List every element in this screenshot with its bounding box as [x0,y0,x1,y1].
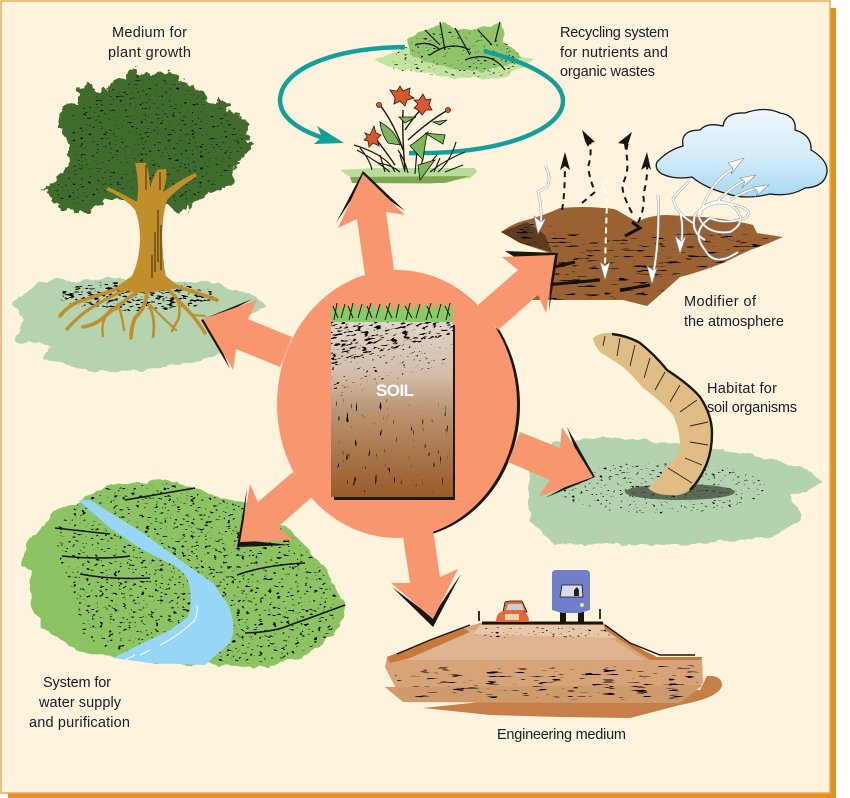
white arrows [538,165,765,275]
label: habitat for soil organisms: soil organisms [707,400,797,416]
embankment shadow [423,676,722,718]
label: recycling system: for nutrients and [560,45,668,61]
plant ground [340,168,477,184]
car [496,601,529,622]
illustration: earthworm [527,333,825,545]
illustration: road embankment [385,570,722,718]
river highlights [125,605,197,660]
stems [375,105,448,170]
canopy [47,68,250,213]
valley land [21,480,345,667]
roots [60,282,217,338]
truck body [552,570,590,613]
white arrowheads [534,158,769,284]
embankment right slope [603,623,702,660]
arrow: to atmosphere [478,255,555,330]
illustration: tree with roots [13,60,267,372]
car grille [505,614,519,620]
driver [574,587,579,596]
label: system for water supply: water supply [38,695,122,711]
arrow: to river [240,472,312,542]
river [78,500,234,665]
label: system for water supply: and purification [29,715,130,731]
embankment texture [394,664,700,700]
car window [506,604,524,610]
dense soil around worm [625,484,735,500]
compost pile ground [373,42,537,78]
worm dark edge [612,334,712,490]
truck [552,570,590,622]
arrow: to tree [203,300,292,370]
black arrowheads [560,130,651,170]
slab dark streaks [545,222,650,290]
label: engineering medium: Engineering medium [497,727,626,743]
teal cycle arrow [280,47,563,153]
label: recycling system: Recycling system [560,25,669,41]
illustration: recycling loop [280,22,563,184]
soil box shadow [334,325,455,500]
car body [496,611,529,622]
flowers [364,86,450,147]
trunk and branches [106,163,197,293]
root zone speckles [60,282,217,311]
car roof [503,601,527,612]
circle shadow [433,328,520,534]
label: modifier of the atmosphere: Modifier of [684,294,757,310]
posts [479,609,600,621]
truck wheels [560,612,584,622]
embankment top layer [473,625,620,638]
soil middle dashes [332,328,453,400]
embankment body [385,623,703,703]
soil box [331,322,453,497]
slab dark left edge [501,222,552,252]
windshield [560,585,583,597]
trunk shading [146,165,161,278]
compost pile [408,24,522,72]
label: medium for plant growth: Medium for [112,25,187,41]
grass strip [331,302,453,322]
illustration: earth slab and atmosphere [500,110,827,308]
cloud [656,110,827,197]
black dashed arrows [562,140,647,223]
compost strokes [415,22,505,70]
label: habitat for soil organisms: Habitat for [707,381,777,397]
label: recycling system: organic wastes [560,64,655,80]
valley forest texture [50,483,345,667]
circle [277,270,517,538]
label: system for water supply: System for [43,675,111,691]
label: modifier of the atmosphere: the atmosphere [684,314,784,330]
worm body [593,333,712,495]
soil lower cracks [336,398,448,492]
label: medium for plant growth: plant growth [108,45,191,61]
slab [501,207,783,306]
soil label: SOIL [376,381,414,400]
worm rings [603,336,708,483]
ridge lines [55,488,345,633]
plant ground shadow [350,176,470,183]
compost texture [386,30,518,77]
worm soil speckles [555,460,765,515]
arrow shadows [201,171,595,627]
embankment light layer [396,630,645,660]
central soil diagram [201,171,595,627]
tree ground [13,278,267,372]
slope black edges [397,625,695,655]
lower layer [385,685,703,703]
arrow: to worm [508,427,593,497]
arrow: to plants [338,174,405,275]
white dashed arrow [605,178,607,265]
illustration: river valley [21,480,345,667]
canopy texture [55,76,244,204]
cycle arrowhead [314,126,344,144]
soil top dark dashes [331,322,453,364]
slab texture [510,224,770,304]
grass blades [354,142,465,174]
leaves [380,117,447,180]
arrow: to road [391,530,458,619]
road top texture [474,627,610,638]
worm ground [527,437,825,545]
headlight [580,603,584,607]
road [482,622,603,624]
embankment left slope [387,628,470,663]
